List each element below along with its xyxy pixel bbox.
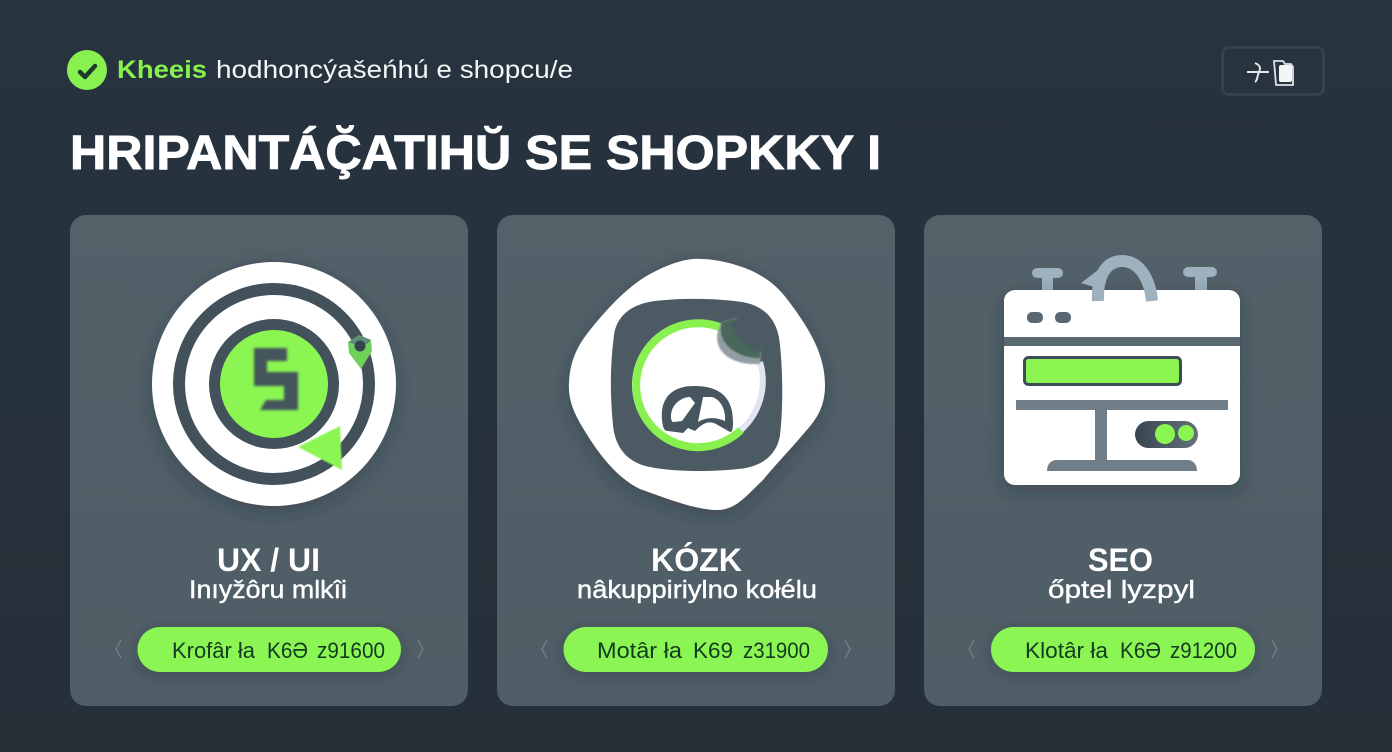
icon: tool glyph	[1247, 63, 1269, 82]
pegs	[1032, 267, 1217, 298]
folded corner	[717, 318, 762, 364]
header tagline	[67, 50, 573, 90]
card heading: SEO	[1088, 542, 1153, 578]
icon: blob with ring	[569, 259, 825, 510]
icon: document square	[1274, 61, 1293, 85]
toggle	[1135, 421, 1198, 448]
pill button	[991, 627, 1255, 672]
icon: map pin	[348, 335, 372, 369]
pill button	[564, 627, 828, 672]
bag handle	[1081, 261, 1152, 301]
pill button: z31900	[743, 638, 810, 663]
pill button: Krofâr ła	[172, 638, 256, 663]
main title: HRIPANTÁÇ̆ATIHŬ SE SHOPKKY I	[70, 125, 881, 180]
icon: face glyph	[662, 386, 733, 433]
progress ring	[636, 323, 741, 447]
pill button: Klotâr ła	[1025, 638, 1109, 663]
panel: UX / UI	[70, 215, 468, 706]
icon: green check badge	[67, 50, 107, 90]
left chevron	[542, 640, 547, 658]
pill button: Motâr ła	[597, 638, 683, 663]
pill button: z91600	[317, 638, 385, 663]
panel: SEO	[924, 215, 1322, 706]
icon: concentric target	[152, 262, 396, 506]
icon: S glyph	[254, 348, 298, 410]
tagline brand word: Kheeis	[117, 56, 207, 84]
icon: browser window with bag handle	[1004, 261, 1240, 485]
right chevron	[418, 640, 423, 658]
pill button	[138, 627, 401, 672]
card heading: UX / UI	[217, 542, 320, 578]
card subheading: őptel lyzpyl	[1048, 576, 1195, 604]
right chevron	[1272, 640, 1277, 658]
pill button: z91200	[1170, 638, 1237, 663]
top-right button with icons	[1222, 48, 1324, 94]
pill button: K6Ә	[267, 638, 308, 663]
right chevron	[845, 640, 850, 658]
icon: green triangle	[298, 426, 342, 470]
pill button: K6Ә	[1120, 638, 1161, 663]
pill button: K69	[693, 638, 733, 663]
stand divider	[1016, 400, 1228, 410]
panel: KÓZK	[497, 215, 895, 706]
tagline text: hodhoncýašeńhú e shopcu/e	[216, 56, 573, 84]
left chevron	[969, 640, 974, 658]
card heading: KÓZK	[651, 542, 742, 578]
card subheading: nâkuppiriylno kołélu	[577, 576, 817, 604]
left chevron	[116, 640, 121, 658]
green search bar	[1024, 358, 1180, 384]
card subheading: Inıyžôru mlkîi	[189, 576, 347, 604]
